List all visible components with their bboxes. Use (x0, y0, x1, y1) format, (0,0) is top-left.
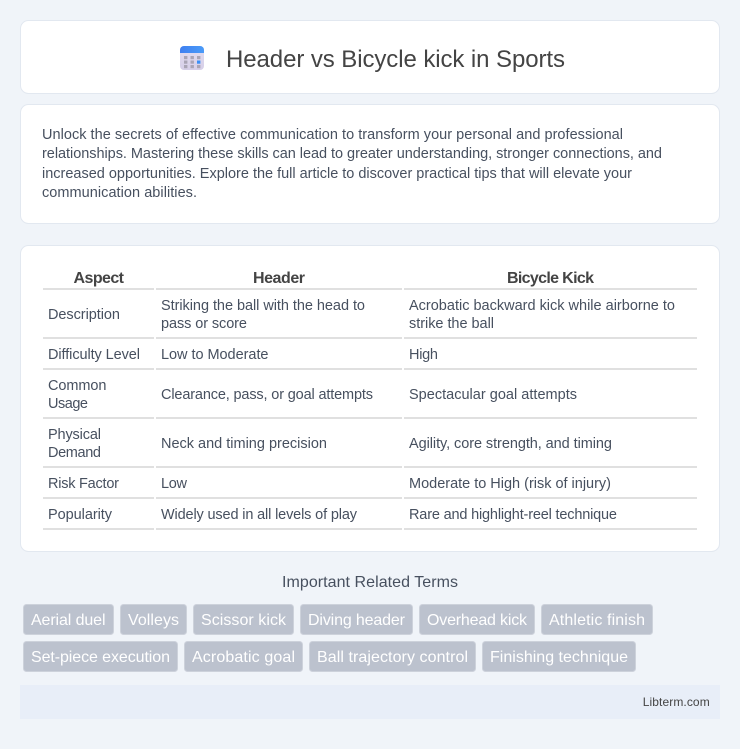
tag: aerial duel (24, 604, 114, 634)
tag: volleys (120, 604, 186, 634)
table row: physical demand: Neck and timing precision (161, 436, 327, 452)
table row: difficulty level (43, 347, 697, 370)
table row: description: Striking the ball with the head to (161, 298, 365, 314)
tag: scissor kick (194, 604, 294, 634)
icon: calendar (180, 46, 204, 70)
table row: description: Acrobatic backward kick while airborne to (409, 298, 675, 314)
tag: acrobatic goal (184, 642, 302, 672)
tag: overhead kick: Overhead kick (427, 612, 528, 629)
footer attribution: Libterm.com (643, 695, 710, 709)
table row: difficulty level: Low to Moderate (161, 347, 268, 363)
table row: risk factor: Low (161, 476, 188, 492)
panel: comparison table (20, 246, 720, 552)
tag: acrobatic goal: Acrobatic goal (192, 649, 295, 666)
table header row: Aspect (74, 270, 125, 287)
table row: description (43, 298, 697, 339)
table row: physical demand: Demand (48, 445, 101, 461)
tag: scissor kick: Scissor kick (201, 612, 287, 629)
text block: introduction paragraph (42, 127, 662, 201)
tag: finishing technique: Finishing technique (490, 649, 628, 666)
table row: popularity: Popularity (48, 507, 113, 523)
table row: risk factor (43, 476, 697, 499)
tag: ball trajectory control: Ball trajectory control (317, 649, 468, 666)
table row: common usage (43, 378, 697, 419)
table row: difficulty level: High (409, 347, 438, 363)
tag: set-piece execution: Set-piece execution (31, 649, 170, 666)
table row: description: pass or score (161, 316, 247, 332)
tag: athletic finish: Athletic finish (549, 612, 645, 629)
table header row (43, 270, 697, 290)
table row: common usage: Common (48, 378, 106, 394)
text block: introduction paragraph: Unlock the secrets of effective communication to transform your personal and professional (42, 127, 623, 143)
table row: common usage: Usage (48, 396, 88, 412)
text block: introduction paragraph: increased opportunities. Explore the full article to discover practical tips that will elevate your (42, 166, 632, 182)
tag: athletic finish (542, 604, 652, 634)
panel: introduction (20, 104, 720, 224)
table row: risk factor: Moderate to High (risk of injury) (409, 476, 611, 492)
table row: popularity: Widely used in all levels of play (161, 507, 358, 523)
table header row: Header (253, 270, 305, 287)
table row: popularity: Rare and highlight-reel technique (409, 507, 617, 523)
title: Header vs Bicycle kick in Sports (226, 46, 565, 73)
table row: physical demand (43, 427, 697, 468)
table row: common usage: Clearance, pass, or goal attempts (161, 387, 373, 403)
table row: common usage: Spectacular goal attempts (409, 387, 577, 403)
table row: difficulty level: Difficulty Level (48, 347, 140, 363)
tag: ball trajectory control (310, 642, 476, 672)
text block: introduction paragraph: communication abilities. (42, 185, 197, 201)
table row: physical demand: Physical (48, 427, 101, 443)
heading: important related terms: Important Related Terms (282, 574, 458, 591)
table row: description: strike the ball (409, 316, 494, 332)
tag: volleys: Volleys (128, 612, 179, 629)
table row: description: Description (48, 307, 120, 323)
tag: aerial duel: Aerial duel (31, 612, 106, 629)
table row: popularity (43, 507, 697, 530)
table row: risk factor: Risk Factor (48, 476, 119, 492)
table row: physical demand: Agility, core strength, and timing (409, 436, 612, 452)
tag: diving header (300, 604, 412, 634)
table header row: Bicycle Kick (507, 270, 594, 287)
related terms tags (24, 604, 652, 672)
footer bar (20, 685, 720, 719)
tag: overhead kick (420, 604, 534, 634)
panel: title header (20, 20, 720, 94)
text block: introduction paragraph: relationships. Mastering these skills can lead to greater understanding, stronger connections, and (42, 146, 662, 162)
tag: set-piece execution (24, 642, 178, 672)
tag: diving header: Diving header (308, 612, 406, 629)
tag: finishing technique (482, 642, 636, 672)
